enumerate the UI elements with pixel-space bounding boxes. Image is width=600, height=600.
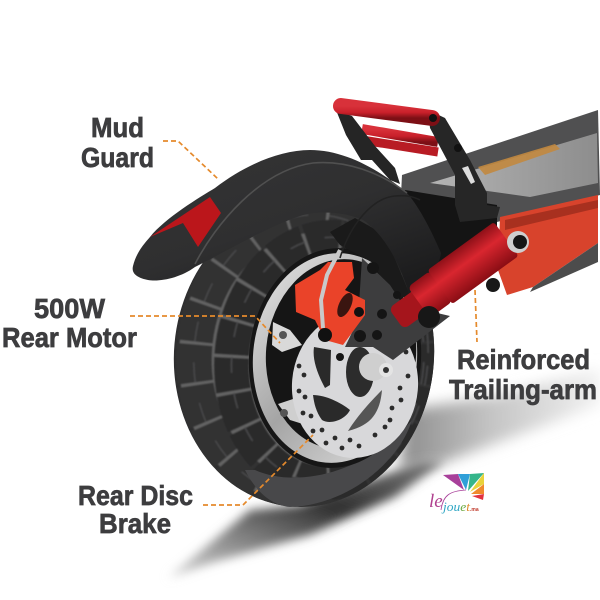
inner fender shade	[330, 218, 410, 300]
rim	[244, 246, 426, 470]
tail light	[150, 197, 221, 247]
deck logo	[478, 144, 560, 175]
label: rear disc brake: Rear Disc	[78, 480, 193, 511]
tread	[179, 212, 434, 507]
logo: le jouet: .ma	[470, 507, 479, 513]
label: mud guard: Guard	[81, 142, 154, 173]
infographic	[3, 98, 600, 578]
logo: le jouet: jouet	[441, 499, 470, 514]
bolts	[336, 262, 401, 361]
label: 500W rear motor: 500W	[34, 293, 106, 324]
tire	[161, 192, 447, 518]
disc holes	[297, 350, 410, 450]
lower frame	[530, 243, 598, 292]
logo kite	[441, 473, 484, 510]
axle nut	[346, 347, 393, 397]
deck body	[400, 110, 600, 222]
logo text: le	[429, 491, 443, 512]
frame dark joint	[395, 190, 497, 300]
label: 500W rear motor	[2, 293, 137, 353]
brackets	[336, 110, 400, 184]
rear shock absorber	[384, 222, 529, 336]
callout line: mud guard	[163, 141, 218, 179]
side reflector	[498, 195, 598, 295]
lower shock bolt	[486, 278, 500, 292]
trailing arm plate	[345, 258, 450, 360]
rear handle	[336, 106, 500, 222]
deck plate	[430, 133, 598, 197]
label: 500W rear motor: Rear Motor	[2, 322, 137, 353]
callout line: rear motor	[130, 316, 280, 343]
callout line: rear disc brake	[203, 435, 313, 505]
brake hose spring	[321, 250, 340, 328]
lower tubes	[362, 129, 438, 142]
rim outer groove	[240, 241, 430, 475]
label: rear disc brake: Brake	[99, 508, 171, 539]
wedge shadow under wheel	[168, 461, 445, 578]
hub interior	[258, 253, 424, 455]
right shadow band	[400, 368, 600, 470]
label: mud guard: Mud	[91, 112, 144, 143]
label: rear disc brake	[78, 480, 193, 539]
callout line: trailing arm	[475, 290, 477, 342]
deck and frame	[395, 110, 600, 300]
label: reinforced trailing-arm	[449, 344, 597, 405]
wheel	[174, 212, 434, 507]
brake disc	[286, 307, 424, 463]
logo: le jouet	[429, 473, 484, 514]
brake caliper	[295, 250, 365, 345]
hub spoke	[272, 322, 302, 352]
label: mud guard	[81, 112, 154, 173]
disc cut-outs	[313, 347, 382, 431]
wheel ground shadow	[168, 368, 600, 578]
mud guard fender	[133, 150, 441, 300]
fender ridge	[195, 163, 407, 264]
lower tire smooth band	[245, 420, 412, 507]
label: reinforced trailing-arm: Reinforced	[457, 344, 590, 375]
top tube	[341, 106, 432, 118]
brake cable	[340, 196, 420, 258]
